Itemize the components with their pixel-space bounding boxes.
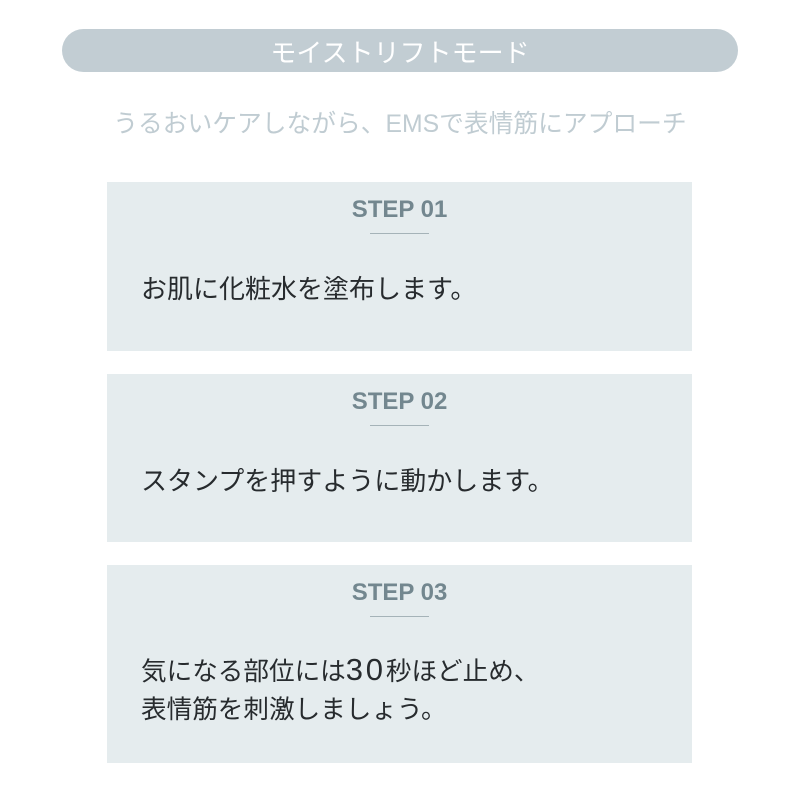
panel: step 03 — [107, 565, 692, 763]
step 03 text: 気になる部位には30秒ほど止め、 — [141, 652, 539, 687]
step 01 text: お肌に化粧水を塗布します。 — [141, 274, 476, 304]
step 03 text: 表情筋を刺激しましょう。 — [141, 696, 447, 724]
panel: step 01 — [107, 182, 692, 351]
step 02 heading: STEP 02 — [352, 388, 447, 415]
subtitle: うるおいケアしながら、EMSで表情筋にアプローチ — [113, 111, 687, 138]
step 01 heading: STEP 01 — [352, 196, 447, 223]
title bar — [62, 29, 738, 72]
step 03 heading: STEP 03 — [352, 579, 447, 606]
step 03 text — [141, 652, 539, 724]
panel: step 02 — [107, 374, 692, 542]
step 02 text: スタンプを押すように動かします。 — [141, 466, 554, 496]
title bar: モイストリフトモード — [270, 38, 530, 68]
